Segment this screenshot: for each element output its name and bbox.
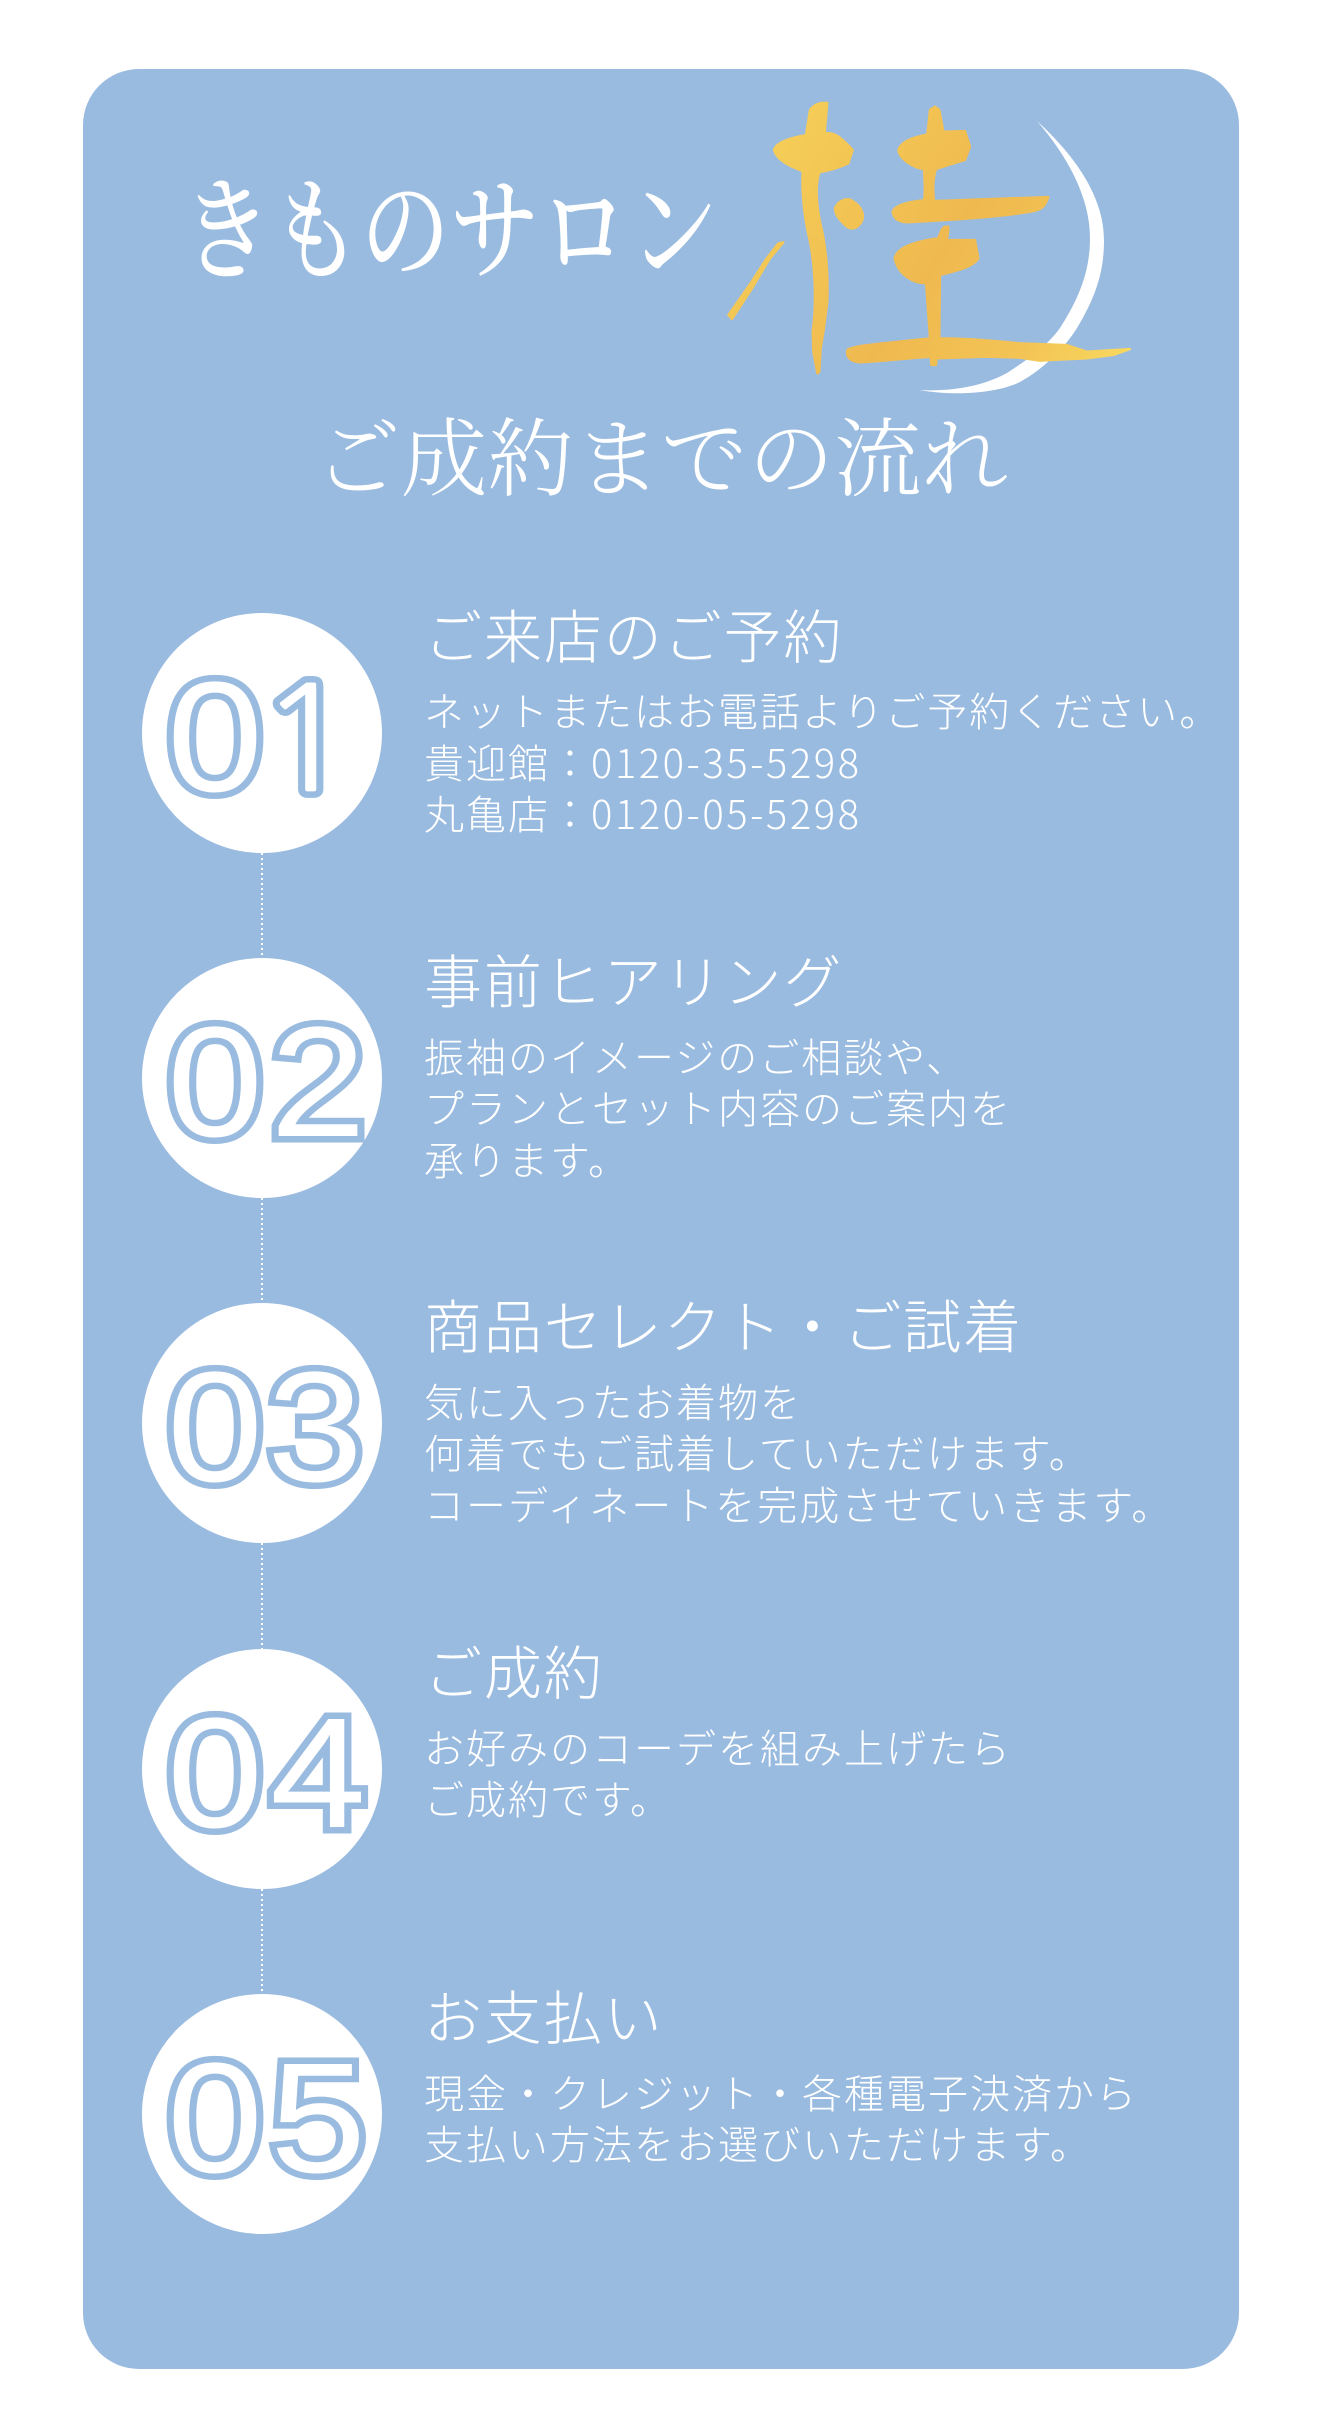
step text 02: 承ります。 — [424, 1129, 630, 1187]
step text 01: 貴迎館： — [424, 732, 592, 790]
step text 04: お好みのコーデを組み上げたら — [424, 1717, 1012, 1775]
number badge 05 — [142, 1994, 382, 2234]
step text 03: 気に入ったお着物を — [424, 1371, 802, 1429]
connector: 02 to 03 — [261, 1198, 263, 1303]
step text 02 — [424, 1026, 1012, 1187]
step text 01: 0120-05-5298 — [591, 783, 861, 841]
number badge 01: 0 — [167, 649, 263, 824]
number badge 04: 4 — [270, 1685, 366, 1860]
step 03 — [142, 1281, 1173, 1543]
number badge 02: 0 — [167, 994, 263, 1169]
step 01 — [142, 591, 1221, 853]
number badge 01 — [142, 613, 382, 853]
number badge 03: 0 — [167, 1339, 263, 1514]
number badge 01: 1 — [257, 667, 354, 813]
connector: 03 to 04 — [261, 1543, 263, 1649]
step text 01: 丸亀店： — [424, 783, 592, 841]
logo: gold brush kanji — [727, 102, 1132, 375]
step title 04: ご成約 — [424, 1627, 604, 1711]
heading: flow to contract: ご成約までの流れ — [314, 412, 1008, 508]
logo: gold brush kanji: 桂 — [754, 29, 1019, 412]
step title 03: 商品セレクト・ご試着 — [424, 1281, 1023, 1365]
step text 04 — [424, 1717, 1012, 1826]
step text 05 — [424, 2062, 1138, 2171]
number badge 03: 3 — [267, 1339, 363, 1514]
step text 02: 振袖のイメージのご相談や、 — [424, 1026, 968, 1084]
step text 04: ご成約です。 — [424, 1768, 672, 1826]
number badge 05: 0 — [167, 2030, 263, 2205]
step 04 — [142, 1627, 1012, 1889]
step text 01: 0120-35-5298 — [591, 732, 861, 790]
number badge 02 — [142, 958, 382, 1198]
step title 01: ご来店のご予約 — [424, 591, 843, 675]
step title 02: 事前ヒアリング — [424, 936, 843, 1020]
step text 03: コーディネートを完成させていきます。 — [424, 1474, 1173, 1532]
step 02 — [142, 936, 1012, 1198]
connector: 04 to 05 — [261, 1889, 263, 1994]
connector: 01 to 02 — [261, 853, 263, 958]
step text 02: プランとセット内容のご案内を — [424, 1077, 1012, 1135]
number badge 04: 0 — [167, 1685, 263, 1860]
step text 03 — [424, 1371, 1173, 1532]
number badge 02: 2 — [270, 994, 366, 1169]
step 05 — [142, 1972, 1138, 2234]
step title 05: お支払い — [424, 1972, 664, 2056]
number badge 03 — [142, 1303, 382, 1543]
logo text: kimono salon: きものサロン — [182, 171, 718, 295]
step text 01 — [424, 680, 1221, 841]
number badge 04 — [142, 1649, 382, 1889]
step text 03: 何着でもご試着していただけます。 — [424, 1422, 1091, 1480]
step text 01: ネットまたはお電話よりご予約ください。 — [424, 680, 1221, 738]
step text 05: 支払い方法をお選びいただけます。 — [424, 2113, 1092, 2171]
logo: crescent moon — [919, 121, 1104, 393]
step text 05: 現金・クレジット・各種電子決済から — [424, 2062, 1138, 2120]
number badge 05: 5 — [270, 2030, 366, 2205]
